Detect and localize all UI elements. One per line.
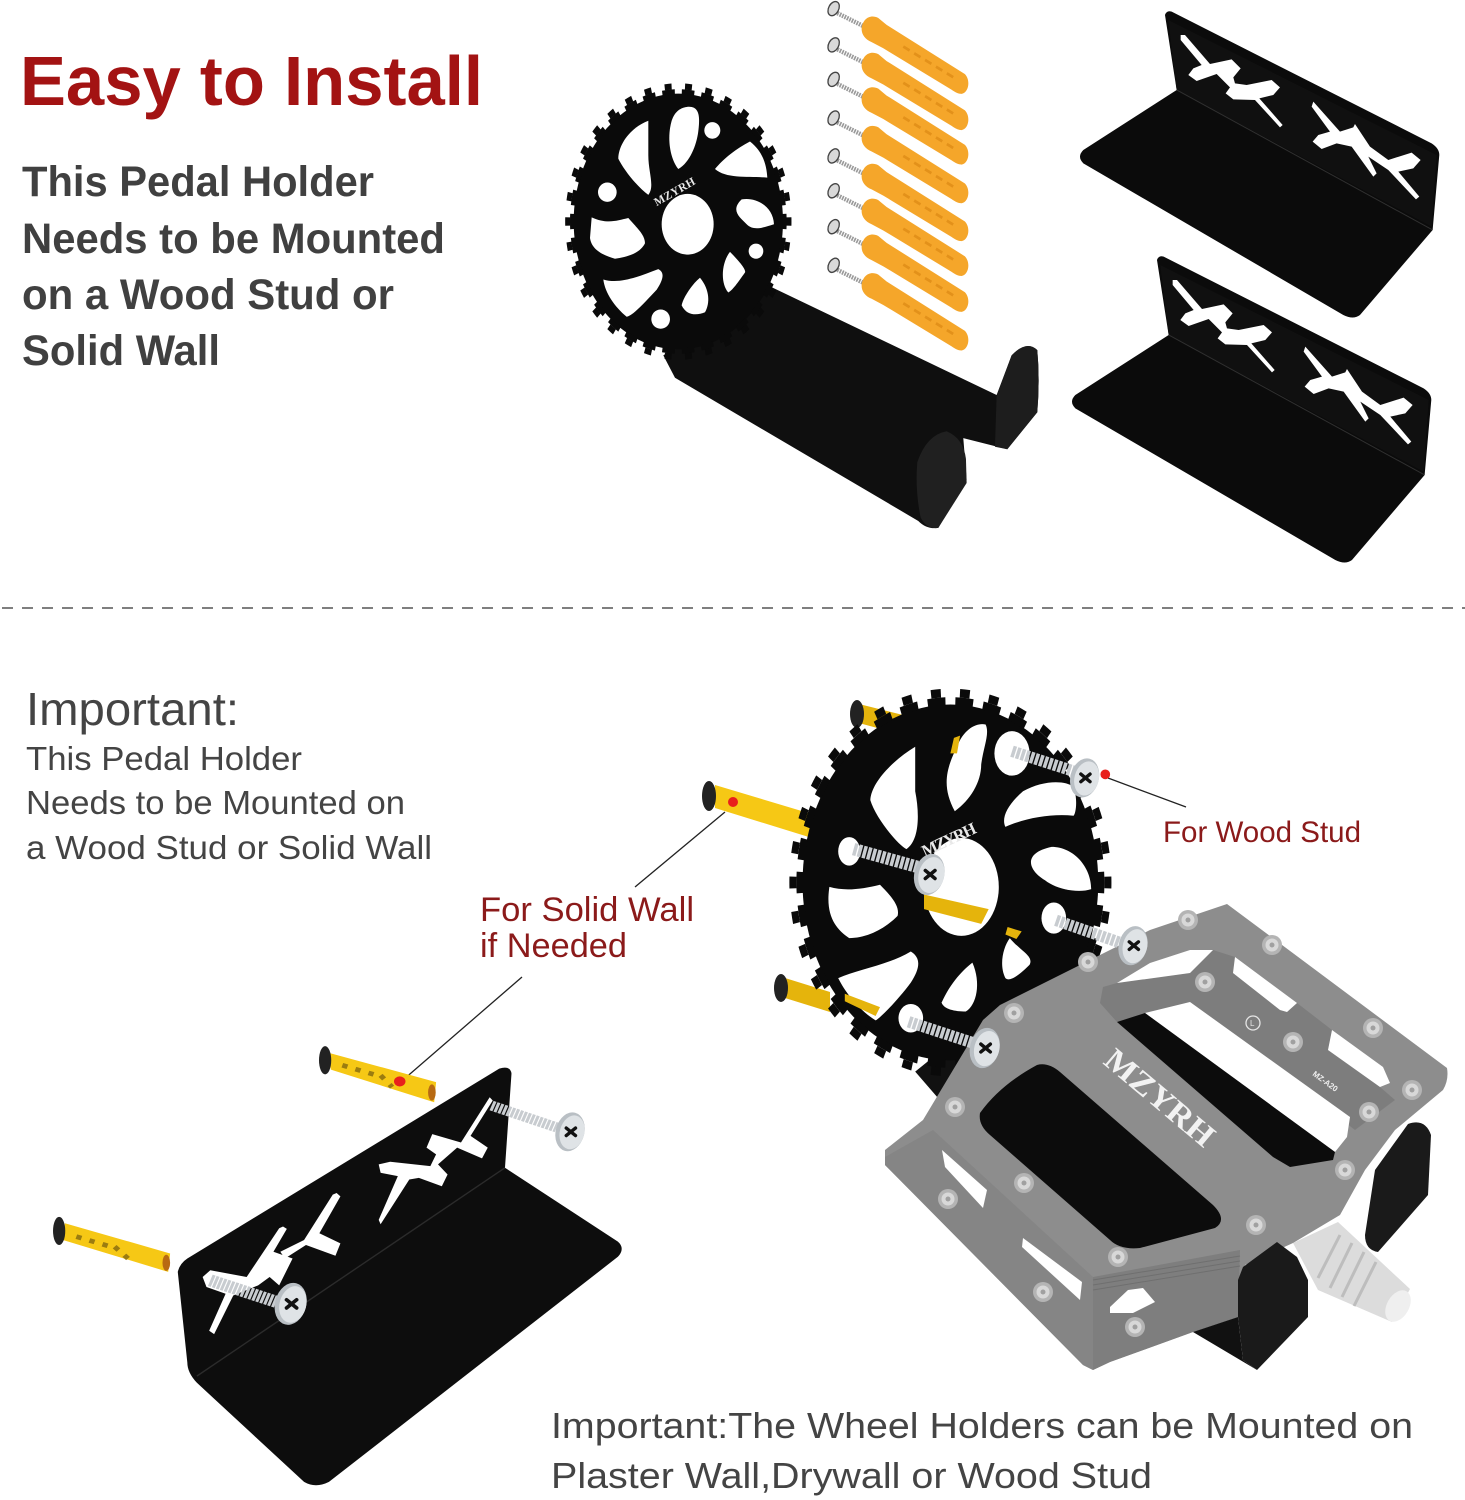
screw right bbox=[1056, 920, 1152, 969]
wheel holder with sprocket plate bbox=[568, 86, 1039, 528]
pedal logo: MZYRH bbox=[1098, 1041, 1223, 1154]
bracket body bbox=[178, 1068, 622, 1485]
rubber pads bbox=[1193, 1122, 1431, 1370]
sprocket plate bbox=[793, 693, 1108, 1072]
pedal left window bbox=[980, 1064, 1221, 1248]
callout for solid wall: For Solid Wall bbox=[480, 891, 694, 929]
sprocket plate: MZYRH bbox=[652, 176, 697, 209]
anchors behind sprocket bbox=[702, 700, 915, 1012]
pedal model mark: MZ-A20 bbox=[1311, 1069, 1340, 1094]
important note left: Important: bbox=[26, 683, 239, 735]
callout for wood stud: For Wood Stud bbox=[1163, 816, 1361, 849]
important note left: This Pedal Holder bbox=[26, 740, 302, 777]
bike pedal bbox=[885, 904, 1448, 1370]
L bracket wheel holder upper bbox=[1080, 11, 1439, 317]
intro text block: Solid Wall bbox=[22, 327, 220, 375]
important note left: a Wood Stud or Solid Wall bbox=[26, 829, 432, 866]
pedal right window bbox=[1117, 1013, 1335, 1167]
pedal pins bbox=[938, 910, 1422, 1337]
mounting screws on sprocket bbox=[854, 751, 1152, 1072]
anchor upper bbox=[319, 1046, 436, 1102]
screw bottom bbox=[909, 1022, 1004, 1072]
important note bottom: Plaster Wall,Drywall or Wood Stud bbox=[551, 1455, 1152, 1496]
title: Easy to Install bbox=[20, 42, 483, 120]
screw centre left bbox=[854, 849, 949, 899]
mounted L bracket with anchors and screws bbox=[53, 1046, 622, 1485]
holder arm and hooks bbox=[663, 286, 1039, 528]
important note bottom bbox=[551, 1405, 1413, 1496]
dashed divider bbox=[2, 607, 1465, 609]
intro text block: on a Wood Stud or bbox=[22, 271, 394, 319]
pedal openings bbox=[942, 950, 1390, 1313]
sprocket plate bbox=[568, 86, 789, 357]
wall anchors and screws set bbox=[826, 0, 968, 351]
callout for wood stud bbox=[1108, 778, 1361, 849]
pedal model mark: L bbox=[1250, 1019, 1255, 1028]
exploded sprocket holder bbox=[793, 693, 1108, 1107]
pedal model mark bbox=[1246, 1016, 1340, 1094]
L bracket wheel holder lower bbox=[1072, 256, 1431, 562]
screw left bbox=[210, 1279, 311, 1328]
sprocket plate: MZYRH bbox=[919, 819, 979, 861]
important note left: Needs to be Mounted on bbox=[26, 784, 405, 821]
wood stud marker dot bbox=[1100, 769, 1110, 779]
important note left bbox=[26, 683, 432, 866]
pedal body bbox=[885, 904, 1448, 1370]
axle bbox=[1293, 1222, 1416, 1326]
callout for solid wall bbox=[403, 891, 694, 1080]
important note bottom: Important:The Wheel Holders can be Mounted on bbox=[551, 1405, 1413, 1446]
arm behind sprocket bbox=[915, 1018, 999, 1107]
anchor lower bbox=[53, 1217, 170, 1272]
screw top right bbox=[1012, 751, 1103, 801]
screw right bbox=[492, 1106, 589, 1155]
intro text block: This Pedal Holder bbox=[22, 158, 374, 206]
callout for solid wall: if Needed bbox=[480, 927, 627, 965]
intro text block bbox=[22, 158, 445, 375]
leader line solid wall anchor bbox=[635, 812, 725, 887]
intro text block: Needs to be Mounted bbox=[22, 215, 445, 263]
